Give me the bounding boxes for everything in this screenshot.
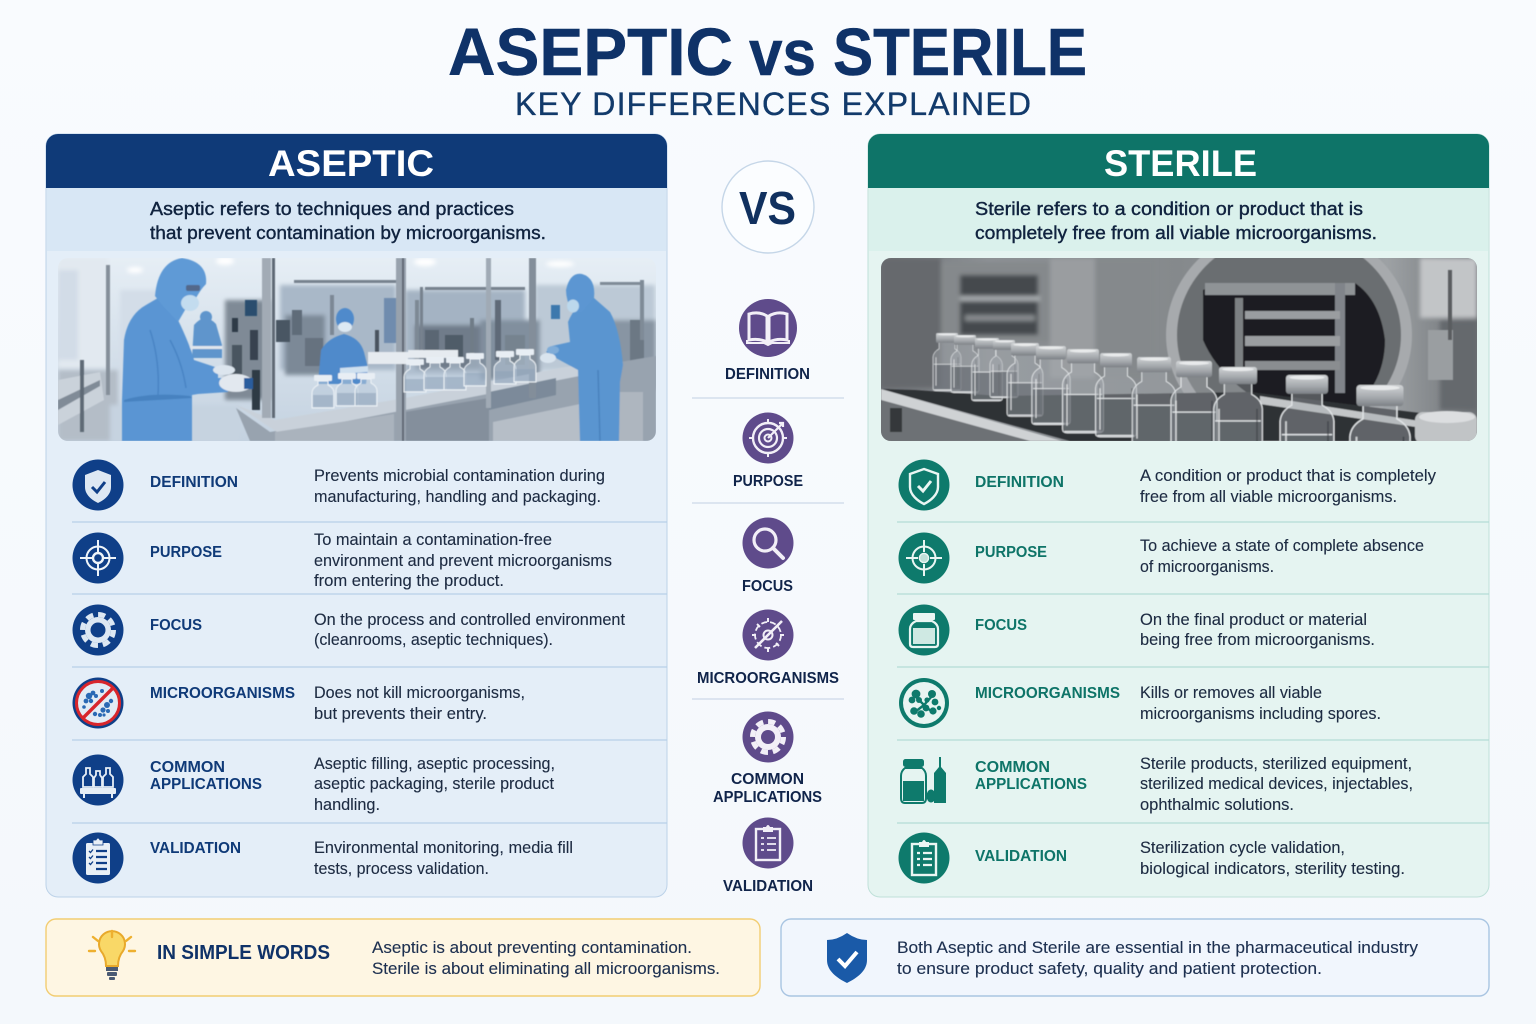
aseptic row: microorganisms: MICROORGANISMS [150, 685, 295, 702]
panel: aseptic [46, 134, 667, 897]
icon: microbes [899, 678, 949, 728]
bottles [312, 375, 334, 408]
aseptic row: focus [72, 604, 625, 656]
title: vs [749, 17, 816, 89]
sterile row: purpose: of microorganisms. [1140, 558, 1274, 576]
icon: clipboard [898, 832, 950, 884]
aseptic row: definition [72, 460, 605, 510]
sterile row: purpose [898, 532, 1424, 584]
sterile row: common applications: COMMON [975, 759, 1050, 776]
vs badge [722, 161, 814, 253]
centre: common applications: COMMON [731, 771, 804, 788]
sterile header [868, 134, 1489, 188]
sterile row: focus [898, 604, 1375, 656]
sterile row: definition: free from all viable microorganisms. [1140, 488, 1397, 506]
sterile row: microorganisms: microorganisms including spores. [1140, 705, 1381, 723]
aseptic row: purpose: from entering the product. [314, 572, 504, 590]
aseptic row: microorganisms: Does not kill microorganisms, [314, 684, 525, 702]
aseptic row: microorganisms [72, 678, 525, 728]
aseptic header [46, 134, 667, 188]
aseptic row: validation [72, 832, 573, 884]
centre: purpose: PURPOSE [733, 473, 803, 490]
aseptic row: focus: (cleanrooms, aseptic techniques). [314, 631, 553, 649]
aseptic row: validation: VALIDATION [150, 840, 241, 857]
sterile row: purpose: To achieve a state of complete absence [1140, 537, 1424, 555]
machine tops [368, 352, 408, 364]
aseptic row dividers [72, 522, 667, 823]
aseptic header: ASEPTIC [268, 143, 434, 184]
callout: shared importance: Both Aseptic and Sterile are essential in the pharmaceutical industry [897, 938, 1418, 957]
icon: open book [739, 299, 797, 357]
aseptic row: validation: tests, process validation. [314, 860, 489, 878]
centre: definition: DEFINITION [725, 366, 810, 383]
icon: light bulb [89, 931, 135, 980]
centre: common applications [713, 712, 822, 806]
sterile row: common applications: Sterile products, sterilized equipment, [1140, 755, 1412, 773]
icon: vial and ampoule [901, 757, 946, 803]
centre column: criteria list [697, 299, 839, 895]
icon: clipboard [72, 832, 124, 884]
icon: bottles on tray [72, 754, 124, 806]
frames [106, 265, 110, 395]
icon: bullseye [742, 412, 794, 464]
aseptic row: purpose: PURPOSE [150, 544, 222, 561]
centre: definition [725, 299, 810, 383]
sterile row: validation: VALIDATION [975, 848, 1067, 865]
sterile row: common applications: sterilized medical devices, injectables, [1140, 775, 1413, 793]
machine clutter [232, 280, 644, 410]
centre: microorganisms: MICROORGANISMS [697, 670, 839, 687]
callout: shared importance [781, 919, 1489, 996]
conveyor [881, 389, 1477, 441]
icon: clipboard [742, 818, 794, 868]
icon: shield check [72, 460, 124, 510]
photo: cleanroom filling line [58, 257, 656, 441]
aseptic row: focus: On the process and controlled environment [314, 611, 625, 629]
subtitle: KEY DIFFERENCES EXPLAINED [515, 86, 1031, 122]
aseptic description: that prevent contamination by microorganisms. [150, 222, 546, 243]
photo: vials and steriliser [881, 258, 1477, 441]
icon: target [72, 532, 124, 584]
vials [933, 333, 961, 391]
sterile row: microorganisms [899, 678, 1381, 728]
aseptic row: common applications: APPLICATIONS [150, 776, 262, 793]
aseptic row: definition: manufacturing, handling and packaging. [314, 488, 601, 506]
title: STERILE [833, 15, 1087, 90]
aseptic row: purpose: environment and prevent microorganisms [314, 552, 612, 570]
title: ASEPTIC [448, 15, 733, 90]
icon: jar [898, 604, 950, 656]
callout: shared importance: to ensure product safety, quality and patient protection. [897, 959, 1322, 978]
sterile row dividers [897, 522, 1489, 823]
title [448, 15, 1087, 90]
aseptic row: purpose: To maintain a contamination-free [314, 531, 552, 549]
sterile row: purpose: PURPOSE [975, 544, 1047, 561]
sterile description: Sterile refers to a condition or product that is [975, 198, 1363, 219]
callout: in simple words: Sterile is about eliminating all microorganisms. [372, 959, 720, 978]
callout: in simple words: Aseptic is about preventing contamination. [372, 938, 692, 957]
callout: in simple words: IN SIMPLE WORDS [157, 942, 330, 964]
centre: focus [742, 518, 794, 595]
aseptic row: common applications: COMMON [150, 759, 225, 776]
sterile row: validation: biological indicators, sterility testing. [1140, 860, 1405, 878]
right person [546, 298, 623, 441]
centre: microorganisms [697, 610, 839, 687]
callout: in simple words [46, 919, 760, 996]
steriliser door [1166, 258, 1412, 441]
icon: shield check [898, 460, 950, 510]
aseptic row: common applications: Aseptic filling, aseptic processing, [314, 755, 555, 773]
sterile row: focus: being free from microorganisms. [1140, 631, 1375, 649]
small person [192, 318, 222, 358]
icon: magnifier [742, 518, 794, 568]
centre: focus: FOCUS [742, 578, 793, 595]
centre person [318, 334, 368, 384]
aseptic description: Aseptic refers to techniques and practices [150, 198, 514, 219]
centre: validation: VALIDATION [723, 878, 813, 895]
centre: validation [723, 818, 813, 895]
aseptic description [47, 188, 666, 251]
sterile row: focus: FOCUS [975, 617, 1027, 634]
sterile header: STERILE [1104, 143, 1257, 184]
aseptic row: common applications: handling. [314, 796, 380, 814]
sterile row: validation: Sterilization cycle validation, [1140, 839, 1345, 857]
aseptic row: definition: DEFINITION [150, 474, 238, 491]
centre: common applications: APPLICATIONS [713, 789, 822, 806]
aseptic row: validation: Environmental monitoring, media fill [314, 839, 573, 857]
sterile row: definition [898, 460, 1437, 510]
centre dividers [692, 398, 844, 699]
left person [122, 295, 230, 441]
sterile description: completely free from all viable microorganisms. [975, 222, 1377, 243]
sterile row: common applications: APPLICATIONS [975, 776, 1087, 793]
aseptic row: microorganisms: but prevents their entry. [314, 705, 487, 723]
icon: gear [742, 712, 794, 762]
icon: target [898, 532, 950, 584]
aseptic row: purpose [72, 531, 612, 590]
sterile row: definition: DEFINITION [975, 474, 1064, 491]
icon: shield check [827, 933, 867, 983]
icon: gear [72, 604, 124, 656]
icon: no microbes [72, 678, 124, 728]
aseptic row: common applications [72, 754, 555, 814]
aseptic row: focus: FOCUS [150, 617, 202, 634]
sterile row: microorganisms: MICROORGANISMS [975, 685, 1120, 702]
sterile row: common applications: ophthalmic solutions. [1140, 796, 1294, 814]
sterile description [869, 188, 1488, 251]
centre: purpose [733, 412, 803, 490]
sterile row: microorganisms: Kills or removes all viable [1140, 684, 1322, 702]
panel: sterile [868, 134, 1489, 897]
sterile row: common applications [901, 755, 1413, 814]
vs badge: VS [739, 182, 796, 234]
icon: crossed microbe [742, 610, 794, 660]
steel table [236, 356, 656, 441]
aseptic row: common applications: aseptic packaging, sterile product [314, 775, 554, 793]
sterile row: definition: A condition or product that is completely [1140, 467, 1437, 485]
aseptic row: definition: Prevents microbial contamination during [314, 467, 605, 485]
sterile row: focus: On the final product or material [1140, 611, 1367, 629]
sterile row: validation [898, 832, 1405, 884]
